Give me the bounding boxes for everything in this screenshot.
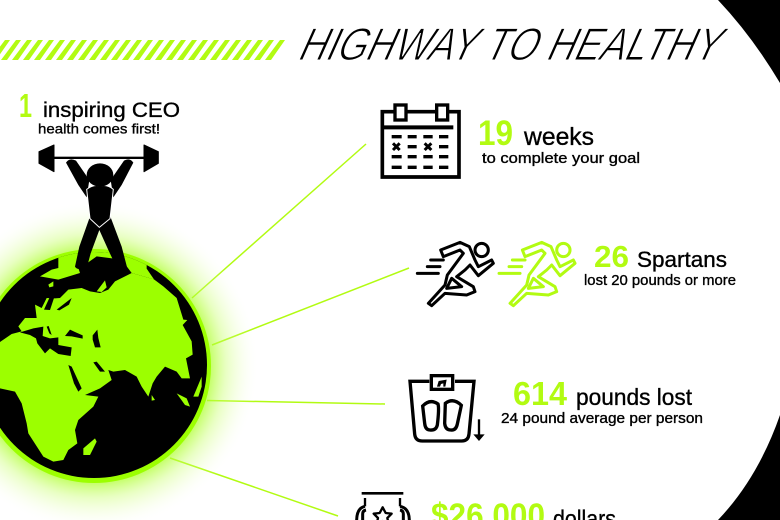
stat: 26 Spartans	[584, 239, 736, 289]
stat: 19 weeks: weeks	[523, 123, 594, 151]
icon: runner black	[417, 242, 493, 306]
stat: inspiring CEO: health comes first!	[38, 120, 160, 136]
stat: 19 weeks	[478, 114, 640, 167]
stat: inspiring CEO	[19, 87, 180, 136]
globe with glow	[0, 201, 259, 520]
icon: trophy belt	[357, 493, 409, 520]
legs	[75, 217, 127, 269]
arms	[66, 159, 133, 197]
icon: runner lime	[499, 242, 575, 306]
stat: 614 pounds lost: 24 pound average per person	[501, 411, 703, 427]
stat: 19 weeks: to complete your goal	[482, 151, 640, 167]
header stripes	[0, 40, 285, 60]
stat: 614 pounds lost	[501, 375, 703, 427]
stat: 26,000 dollars	[431, 497, 616, 520]
background corner: top right	[718, 0, 780, 83]
weightlifter figure	[39, 145, 158, 269]
icon: weight scale	[410, 376, 485, 441]
barbell	[39, 145, 158, 172]
stat: 26 Spartans: Spartans	[637, 247, 727, 272]
icon: calendar	[382, 105, 459, 177]
head	[87, 163, 113, 187]
stat: 26 Spartans: lost 20 pounds or more	[584, 273, 736, 289]
stat: 614 pounds lost: pounds lost	[576, 384, 693, 410]
stat: 26 Spartans: 26	[594, 239, 629, 274]
globe glow	[0, 201, 259, 520]
background corner: bottom right	[718, 415, 780, 520]
stat: inspiring CEO: 1	[19, 87, 32, 124]
globe ocean	[0, 252, 207, 478]
stat: 614 pounds lost: 614	[513, 375, 568, 412]
torso	[87, 185, 113, 227]
stat: inspiring CEO: inspiring CEO	[43, 99, 180, 122]
connector lines	[170, 144, 409, 516]
stat: 19 weeks: 19	[478, 114, 513, 153]
globe land	[0, 230, 202, 462]
globe rim	[0, 249, 211, 483]
